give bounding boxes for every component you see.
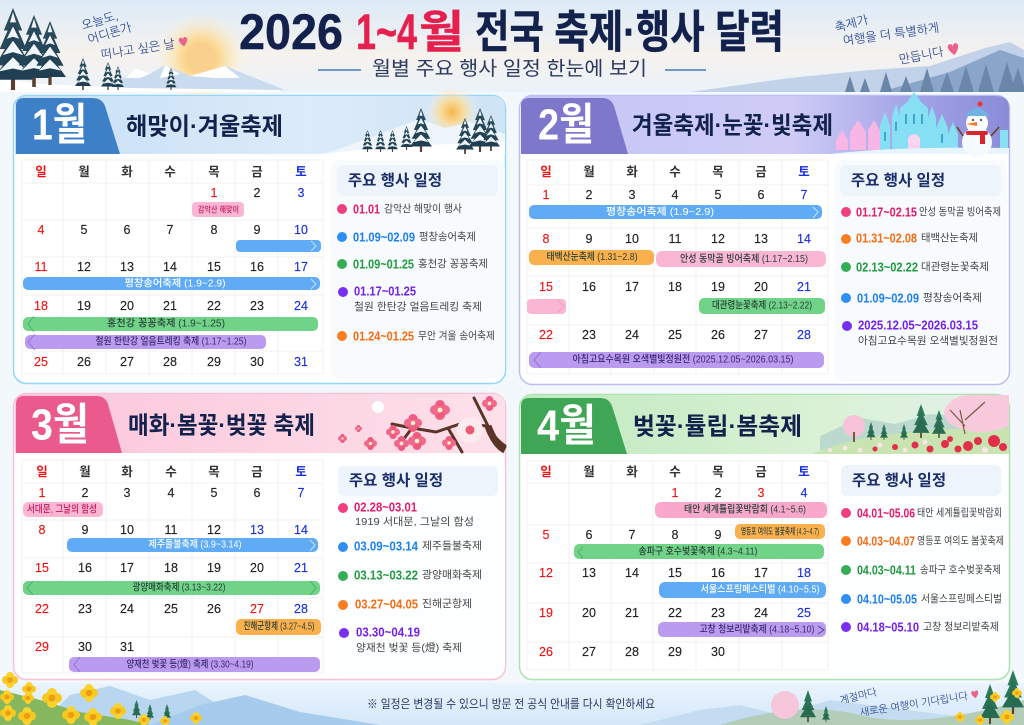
January calendar: 29 bbox=[207, 355, 221, 369]
April calendar: 2 bbox=[715, 486, 722, 500]
January calendar: 13 bbox=[120, 260, 134, 274]
April calendar: 8 bbox=[672, 528, 679, 542]
February schedule: 02.13~02.22 bbox=[856, 260, 918, 274]
handwritten note left: 떠나고 싶은 날 ♥ bbox=[100, 34, 190, 61]
January calendar: 일 bbox=[35, 165, 47, 179]
January calendar: 22 bbox=[207, 299, 221, 313]
February schedule: 01.31~02.08 bbox=[856, 230, 917, 246]
March label: 3월 bbox=[31, 400, 89, 450]
handwritten note right: 만듭니다 ♥ bbox=[898, 41, 962, 67]
April calendar: 3 bbox=[758, 486, 765, 500]
April calendar: 12 bbox=[539, 566, 553, 580]
February calendar: 3 bbox=[629, 188, 636, 202]
January calendar: 17 bbox=[294, 260, 308, 274]
March calendar: 18 bbox=[164, 561, 178, 575]
January calendar: 15 bbox=[207, 260, 221, 274]
bar: 고창 bbox=[658, 622, 826, 637]
February calendar: 23 bbox=[582, 328, 596, 342]
January calendar: 20 bbox=[120, 299, 134, 313]
March calendar: 2 bbox=[82, 486, 89, 500]
March schedule: 03.30~04.19 bbox=[356, 624, 420, 640]
April calendar: 20 bbox=[582, 606, 596, 620]
bar: 양재천: 양재천 벚꽃 등(燈) 축제 (3.30~4.19) bbox=[126, 658, 254, 670]
March calendar: 23 bbox=[78, 602, 92, 616]
panel: March bbox=[14, 394, 506, 680]
January calendar: 23 bbox=[250, 299, 264, 313]
January calendar: 30 bbox=[250, 355, 264, 369]
April calendar: 14 bbox=[625, 566, 639, 580]
April calendar: 토 bbox=[798, 465, 810, 479]
footer note: ※ 일정은 변경될 수 있으니 방문 전 공식 안내를 다시 확인하세요 bbox=[367, 697, 655, 711]
bar: 제주 bbox=[67, 538, 318, 552]
title: 2026 bbox=[239, 4, 343, 60]
March calendar: 19 bbox=[207, 561, 221, 575]
March heading: 매화·봄꽃·벚꽃 축제 bbox=[128, 412, 315, 440]
March schedule: 1919 서대문, 그날의 함성 bbox=[355, 516, 474, 528]
February tab bbox=[521, 98, 628, 154]
April calendar: 1 bbox=[672, 486, 679, 500]
April calendar: 5 bbox=[543, 528, 550, 542]
January calendar: 화 bbox=[121, 164, 133, 179]
February schedule: 대관령눈꽃축제 bbox=[921, 261, 989, 273]
March schedule: 제주들불축제 bbox=[422, 540, 482, 552]
bar: 서대문: 서대문, 그날의 함성 bbox=[27, 502, 97, 516]
ice castle bbox=[830, 92, 1009, 154]
bar: 태백: 태백산눈축제 (1.31~2.8) bbox=[546, 250, 638, 263]
bar: 송파구 bbox=[574, 544, 824, 559]
bar: 진해: 진해군항제 (3.27~4.5) bbox=[244, 620, 314, 632]
January calendar: 토 bbox=[295, 165, 307, 179]
bar: 평창: 평창송어축제 (1.9~2.9) bbox=[124, 278, 226, 290]
bar: 대관령 bbox=[699, 298, 825, 314]
January calendar: 27 bbox=[120, 355, 134, 369]
February calendar: 26 bbox=[711, 328, 725, 342]
January header bbox=[15, 86, 505, 154]
February calendar: 22 bbox=[539, 328, 553, 342]
April schedule: 04.18~05.10 bbox=[857, 620, 919, 634]
March tab bbox=[16, 396, 122, 453]
January calendar: 18 bbox=[34, 299, 48, 313]
February calendar: 21 bbox=[797, 280, 811, 294]
panel: April bbox=[520, 394, 1010, 680]
April calendar bbox=[527, 461, 828, 670]
January calendar: 21 bbox=[163, 299, 177, 313]
February schedule: 태백산눈축제 bbox=[921, 232, 978, 244]
February calendar: 일 bbox=[540, 165, 552, 179]
bar: 감악산 bbox=[192, 202, 244, 217]
March schedule bbox=[331, 460, 505, 675]
January calendar: 4 bbox=[38, 223, 45, 237]
January calendar: 월 bbox=[78, 164, 90, 179]
February calendar: 24 bbox=[625, 328, 639, 342]
bar: 철원: 철원 한탄강 얼음트레킹 축제 (1.17~1.25) bbox=[96, 334, 246, 348]
handwritten note left: 오늘도, bbox=[80, 9, 120, 32]
February calendar: 13 bbox=[754, 232, 768, 246]
January calendar: 31 bbox=[294, 355, 308, 369]
February calendar: 28 bbox=[797, 328, 811, 342]
April calendar: 21 bbox=[625, 606, 639, 620]
April schedule: 서울스프링페스티벌 bbox=[921, 593, 1002, 605]
January schedule: 01.01 bbox=[353, 202, 380, 216]
handwritten note bottom right: 계절마다 bbox=[839, 686, 878, 706]
bar: 평창: 평창송어축제 (1.9~2.9) bbox=[606, 206, 714, 218]
January calendar: 19 bbox=[77, 299, 91, 313]
title: 전국 축제·행사 달력 bbox=[475, 6, 784, 58]
bar: 안성: 안성 동막골 빙어축제 (1.17~2.15) bbox=[680, 253, 808, 265]
April tab bbox=[521, 398, 627, 454]
March calendar: 8 bbox=[39, 523, 46, 537]
bar: 대관령: 대관령눈꽃축제 (2.13~2.22) bbox=[712, 298, 812, 312]
March calendar: 15 bbox=[35, 561, 49, 575]
January schedule: 감악산 해맞이 행사 bbox=[384, 202, 462, 215]
March calendar: 26 bbox=[207, 602, 221, 616]
February label: 2월 bbox=[538, 100, 594, 150]
March calendar: 11 bbox=[165, 523, 178, 537]
March schedule: 03.13~03.22 bbox=[354, 568, 418, 582]
February calendar: 7 bbox=[801, 188, 808, 202]
January schedule: 홍천강 꽁꽁축제 bbox=[418, 257, 488, 270]
April calendar: 9 bbox=[715, 528, 722, 542]
bar: 철원 bbox=[25, 334, 266, 350]
bar: 진해 bbox=[236, 619, 321, 635]
April label: 4월 bbox=[537, 402, 596, 450]
January calendar: 10 bbox=[294, 223, 308, 237]
April calendar: 22 bbox=[668, 606, 682, 620]
bar: 안성 bbox=[656, 251, 826, 267]
January calendar: 25 bbox=[34, 355, 48, 369]
bar: 아침고요: 아침고요수목원 오색별빛정원전 (2025.12.05~2026.03.15) bbox=[572, 352, 794, 366]
February calendar: 8 bbox=[543, 232, 550, 246]
subtitle: 월별 주요 행사 일정 한눈에 보기 bbox=[372, 58, 647, 80]
April calendar: 18 bbox=[797, 566, 811, 580]
bar: 안성 tail bbox=[527, 299, 566, 314]
March calendar: 3 bbox=[124, 486, 131, 500]
March calendar: 30 bbox=[78, 640, 92, 654]
February calendar: 16 bbox=[582, 280, 596, 294]
April schedule: 영등포 여의도 봄꽃축제 bbox=[917, 535, 1004, 547]
January tab bbox=[16, 98, 120, 154]
February calendar: 17 bbox=[625, 280, 639, 294]
February calendar: 화 bbox=[626, 164, 638, 179]
March calendar: 5 bbox=[211, 486, 218, 500]
February header bbox=[521, 92, 1009, 157]
March calendar: 일 bbox=[36, 465, 48, 479]
March calendar: 목 bbox=[208, 465, 220, 479]
February calendar: 27 bbox=[754, 328, 768, 342]
February calendar bbox=[527, 160, 828, 374]
March calendar: 24 bbox=[120, 602, 134, 616]
bar: 감악산: 감악산 해맞이 bbox=[198, 204, 239, 214]
January calendar: 28 bbox=[163, 355, 177, 369]
February calendar: 20 bbox=[754, 280, 768, 294]
April schedule: 04.03~04.11 bbox=[857, 562, 916, 578]
February calendar: 토 bbox=[798, 165, 810, 179]
March calendar: 4 bbox=[168, 486, 175, 500]
bar: 태안: 태안 세계튤립꽃박람회 (4.1~5.6) bbox=[684, 502, 806, 516]
February calendar: 9 bbox=[586, 232, 593, 246]
April calendar: 4 bbox=[801, 486, 808, 500]
January schedule: 철원 한탄강 얼음트레킹 축제 bbox=[354, 301, 482, 313]
bar: 광양: 광양매화축제 (3.13~3.22) bbox=[132, 580, 226, 594]
April calendar: 금 bbox=[755, 465, 767, 479]
title: 1~4 bbox=[356, 4, 417, 60]
bar: 영등포 bbox=[735, 524, 825, 539]
January calendar: 24 bbox=[294, 299, 308, 313]
February calendar: 목 bbox=[712, 165, 724, 179]
bar: 제주: 제주들불축제 (3.9~3.14) bbox=[148, 538, 242, 550]
April schedule: 송파구 호수벚꽃축제 bbox=[920, 564, 1001, 576]
March schedule: 주요 행사 일정 bbox=[349, 472, 443, 490]
April calendar: 화 bbox=[626, 464, 638, 479]
March calendar: 20 bbox=[250, 561, 264, 575]
April schedule: 04.10~05.05 bbox=[857, 592, 917, 606]
February calendar: 19 bbox=[711, 280, 725, 294]
April schedule bbox=[835, 461, 1007, 676]
January calendar: 12 bbox=[77, 260, 91, 274]
February calendar: 금 bbox=[755, 165, 767, 179]
March calendar: 월 bbox=[79, 464, 91, 479]
February calendar: 15 bbox=[539, 280, 553, 294]
March calendar: 6 bbox=[254, 486, 261, 500]
April calendar: 15 bbox=[668, 566, 682, 580]
April calendar: 23 bbox=[711, 606, 725, 620]
bar: 광양 bbox=[23, 580, 320, 595]
March calendar: 7 bbox=[298, 486, 305, 500]
January schedule: 01.09~02.09 bbox=[353, 230, 415, 244]
March calendar: 14 bbox=[294, 523, 308, 537]
footer scenery bbox=[0, 670, 1024, 725]
January calendar: 2 bbox=[254, 186, 261, 200]
March calendar: 토 bbox=[295, 465, 307, 479]
April schedule: 04.01~05.06 bbox=[857, 506, 915, 520]
February schedule: 2025.12.05~2026.03.15 bbox=[858, 318, 978, 332]
April schedule: 태안 세계튤립꽃박람회 bbox=[917, 506, 1002, 519]
February schedule: 아침고요수목원 오색별빛정원전 bbox=[858, 335, 998, 347]
January calendar: 1 bbox=[211, 186, 218, 200]
March schedule: 양재천 벚꽃 등(燈) 축제 bbox=[356, 641, 462, 654]
handwritten note right bbox=[833, 12, 962, 67]
January calendar: 8 bbox=[211, 223, 218, 237]
February calendar: 5 bbox=[715, 188, 722, 202]
April heading: 벚꽃·튤립·봄축제 bbox=[633, 414, 802, 440]
April calendar: 수 bbox=[669, 465, 681, 479]
March calendar: 12 bbox=[207, 523, 221, 537]
bar: 서대문 bbox=[23, 502, 103, 517]
March calendar: 수 bbox=[165, 465, 177, 479]
handwritten note right: 여행을 더 특별하게 bbox=[842, 22, 940, 47]
January calendar: 16 bbox=[250, 260, 264, 274]
January calendar: 3 bbox=[298, 186, 305, 200]
handwritten note left bbox=[80, 9, 190, 61]
bar: 서울: 서울스프링페스티벌 (4.10~5.5) bbox=[700, 582, 820, 596]
January calendar: 26 bbox=[77, 355, 91, 369]
January schedule: 01.24~01.25 bbox=[353, 328, 414, 344]
April schedule: 주요 행사 일정 bbox=[852, 472, 946, 490]
March calendar: 17 bbox=[120, 561, 134, 575]
bar: 평창 tail bbox=[236, 240, 321, 252]
January calendar: 7 bbox=[167, 223, 174, 237]
March header bbox=[15, 394, 505, 453]
March schedule: 03.27~04.05 bbox=[355, 596, 418, 612]
March schedule: 03.09~03.14 bbox=[354, 538, 419, 554]
April header bbox=[521, 395, 1009, 454]
bar: 태안 bbox=[655, 502, 827, 518]
bar: 평창 bbox=[529, 205, 822, 219]
April calendar: 일 bbox=[540, 465, 552, 479]
April calendar: 7 bbox=[629, 528, 636, 542]
February schedule: 평창송어축제 bbox=[923, 292, 982, 304]
February heading: 겨울축제·눈꽃·빛축제 bbox=[632, 112, 833, 140]
April calendar: 24 bbox=[754, 606, 768, 620]
icon: snowman bbox=[957, 102, 999, 157]
April calendar: 월 bbox=[583, 464, 595, 479]
March calendar: 29 bbox=[35, 640, 49, 654]
February calendar: 월 bbox=[583, 164, 595, 179]
February calendar: 2 bbox=[586, 188, 593, 202]
handwritten note bottom right: 새로운 여행이 기다립니다 ♥ bbox=[859, 688, 981, 718]
April calendar: 25 bbox=[797, 606, 811, 620]
January schedule: 평창송어축제 bbox=[419, 231, 476, 243]
January calendar bbox=[22, 160, 323, 374]
January schedule: 무안 겨울 송어축제 bbox=[418, 330, 495, 342]
March calendar: 28 bbox=[294, 602, 308, 616]
April calendar: 29 bbox=[668, 645, 682, 659]
bar: 태백 bbox=[529, 250, 654, 265]
title bbox=[239, 4, 784, 60]
January calendar: 14 bbox=[163, 260, 177, 274]
March calendar: 21 bbox=[294, 561, 308, 575]
March calendar: 금 bbox=[251, 465, 263, 479]
February schedule bbox=[835, 160, 1007, 381]
February calendar: 14 bbox=[797, 232, 811, 246]
March schedule: 진해군항제 bbox=[422, 597, 472, 610]
bar: 영등포: 영등포 여의도 봄꽃축제 (4.3~4.7) bbox=[741, 526, 819, 536]
February calendar: 12 bbox=[711, 232, 725, 246]
handwritten note left: 어디론가 bbox=[86, 21, 133, 46]
January calendar: 금 bbox=[251, 165, 263, 179]
January schedule bbox=[331, 160, 505, 379]
January calendar: 목 bbox=[208, 165, 220, 179]
February schedule: 안성 동막골 빙어축제 bbox=[919, 206, 1001, 218]
bar: 고창: 고창 청보리밭축제 (4.18~5.10) bbox=[700, 624, 814, 636]
February calendar: 25 bbox=[668, 328, 682, 342]
February schedule: 01.09~02.09 bbox=[857, 290, 919, 306]
January calendar: 수 bbox=[164, 165, 176, 179]
February calendar: 18 bbox=[668, 280, 682, 294]
March calendar: 9 bbox=[82, 523, 89, 537]
April calendar: 목 bbox=[712, 465, 724, 479]
panel: January bbox=[14, 86, 506, 384]
April calendar: 13 bbox=[582, 566, 596, 580]
April calendar: 17 bbox=[754, 566, 768, 580]
January calendar: 5 bbox=[81, 223, 88, 237]
February calendar: 1 bbox=[543, 188, 550, 202]
handwritten note right: 축제가 bbox=[833, 12, 869, 34]
April calendar: 30 bbox=[711, 645, 725, 659]
February schedule: 01.17~02.15 bbox=[856, 204, 917, 220]
March calendar: 25 bbox=[164, 602, 178, 616]
April schedule: 04.03~04.07 bbox=[857, 534, 915, 548]
March calendar: 31 bbox=[120, 640, 134, 654]
April calendar: 19 bbox=[539, 606, 553, 620]
April calendar: 6 bbox=[586, 528, 593, 542]
January schedule: 주요 행사 일정 bbox=[348, 172, 442, 190]
April schedule: 고창 청보리밭축제 bbox=[923, 621, 999, 633]
April calendar: 16 bbox=[711, 566, 725, 580]
March calendar: 1 bbox=[39, 486, 46, 500]
February calendar: 6 bbox=[758, 188, 765, 202]
March calendar: 10 bbox=[120, 523, 134, 537]
February calendar: 수 bbox=[669, 165, 681, 179]
bar: 서울 bbox=[659, 582, 826, 598]
March calendar: 화 bbox=[121, 464, 133, 479]
panel: February bbox=[520, 92, 1010, 384]
March calendar: 27 bbox=[250, 602, 264, 616]
March calendar: 22 bbox=[35, 602, 49, 616]
February calendar: 10 bbox=[625, 232, 639, 246]
March schedule: 02.28~03.01 bbox=[354, 500, 417, 514]
January heading: 해맞이·겨울축제 bbox=[126, 114, 283, 140]
January calendar: 11 bbox=[35, 260, 48, 274]
February calendar: 11 bbox=[669, 232, 682, 246]
January calendar: 9 bbox=[254, 223, 261, 237]
bar: 송파구: 송파구 호수벚꽃축제 (4.3~4.11) bbox=[638, 544, 758, 558]
top scenery banner bbox=[0, 0, 1024, 104]
January label: 1월 bbox=[32, 100, 87, 150]
February calendar: 4 bbox=[672, 188, 679, 202]
February schedule: 주요 행사 일정 bbox=[851, 172, 945, 190]
January schedule: 01.09~01.25 bbox=[353, 256, 414, 272]
January calendar: 6 bbox=[124, 223, 131, 237]
bar: 홍천강: 홍천강 꽁꽁축제 (1.9~1.25) bbox=[107, 316, 225, 330]
March schedule: 광양매화축제 bbox=[422, 569, 482, 581]
April calendar: 28 bbox=[625, 645, 639, 659]
bar: 아침고요 bbox=[529, 352, 824, 368]
bar: 평창 bbox=[23, 277, 320, 290]
March calendar: 16 bbox=[78, 561, 92, 575]
January schedule: 01.17~01.25 bbox=[354, 284, 416, 298]
March calendar bbox=[22, 460, 323, 673]
title: 월 bbox=[419, 6, 464, 58]
bar: 양재천 bbox=[69, 657, 320, 672]
April calendar: 27 bbox=[582, 645, 596, 659]
April calendar: 26 bbox=[539, 645, 553, 659]
March calendar: 13 bbox=[250, 523, 264, 537]
bar: 홍천강 bbox=[23, 316, 318, 332]
